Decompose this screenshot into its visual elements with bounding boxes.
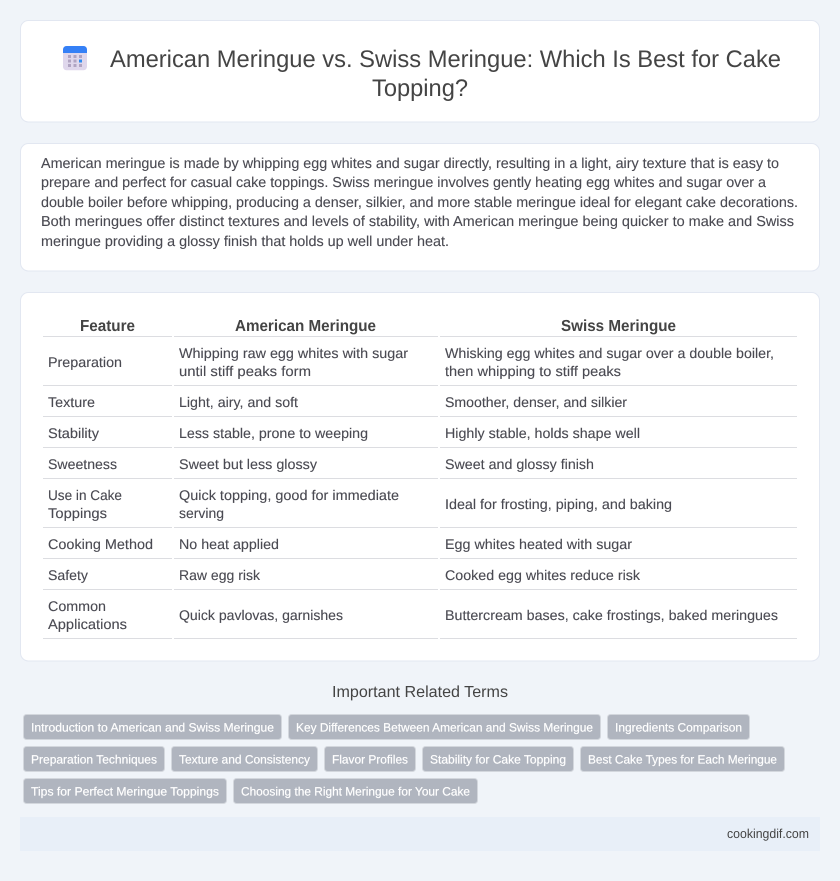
row: sweetness [48, 456, 594, 472]
tag: Tips for Perfect Meringue Toppings [31, 784, 219, 798]
icon: calendar [63, 46, 87, 70]
row: use in cake toppings: Quick topping, good for immediate [179, 487, 399, 503]
tag: Flavor Profiles [332, 752, 408, 766]
row: common applications: Applications [48, 616, 127, 632]
row: texture: Smoother, denser, and silkier [445, 394, 627, 410]
panel: comparison table [20, 292, 820, 661]
row: preparation: Preparation [48, 354, 122, 370]
intro paragraph: meringue providing a glossy finish that holds up well under heat. [41, 234, 449, 250]
tag: Choosing the Right Meringue for Your Cake [241, 784, 470, 798]
tag [324, 746, 416, 772]
table header row: American Meringue [235, 318, 376, 335]
tag [422, 746, 574, 772]
row: safety: Raw egg risk [179, 567, 261, 583]
footer bar: cookingdif.com [727, 826, 809, 841]
row: cooking method: Egg whites heated with sugar [445, 536, 632, 552]
row: common applications [48, 598, 778, 632]
title: American Meringue vs. Swiss Meringue: Which Is Best for Cake [110, 46, 781, 73]
footer bar [20, 817, 820, 851]
intro paragraph: Both meringues offer distinct textures and levels of stability, with American meringue being quicker to make and Swiss [41, 214, 794, 230]
tag: Introduction to American and Swiss Meringue [31, 720, 274, 734]
tag: Stability for Cake Topping [430, 752, 566, 766]
tag [608, 714, 750, 740]
tag [234, 778, 478, 804]
table header row: Feature [80, 318, 135, 335]
row: use in cake toppings [48, 487, 672, 521]
intro paragraph [41, 156, 798, 250]
row: use in cake toppings: Ideal for frosting, piping, and baking [445, 496, 672, 512]
row: texture: Texture [48, 394, 95, 410]
row: cooking method: Cooking Method [48, 536, 153, 552]
title [110, 46, 781, 102]
row: preparation: then whipping to stiff peaks [445, 363, 621, 379]
tag [288, 714, 600, 740]
intro paragraph: double boiler before whipping, producing a denser, silkier, and more stable meringue ideal for elegant cake decorations. [41, 195, 798, 211]
tag: Key Differences Between American and Swiss Meringue [296, 720, 593, 734]
panel: introduction [20, 144, 820, 271]
row: preparation: Whisking egg whites and sugar over a double boiler, [445, 345, 774, 361]
tag [24, 746, 164, 772]
row: texture [48, 394, 627, 410]
heading: important related terms: Important Related Terms [332, 684, 508, 701]
intro paragraph: prepare and perfect for casual cake toppings. Swiss meringue involves gently heating egg whites and sugar over a [41, 175, 766, 191]
row: use in cake toppings: serving [179, 505, 224, 521]
table header row [80, 318, 676, 335]
row: safety: Cooked egg whites reduce risk [445, 567, 641, 583]
row: preparation: Whipping raw egg whites with sugar [179, 345, 408, 361]
row: texture: Light, airy, and soft [179, 394, 298, 410]
row: safety [48, 567, 641, 583]
tag [172, 746, 318, 772]
row: stability: Highly stable, holds shape well [445, 425, 640, 441]
row: preparation [48, 345, 774, 379]
table header row: Swiss Meringue [561, 318, 676, 335]
row: use in cake toppings: Toppings [48, 505, 107, 521]
row: sweetness: Sweet but less glossy [179, 456, 317, 472]
title: Topping? [372, 75, 468, 102]
row: preparation: until stiff peaks form [179, 363, 311, 379]
related term tags [24, 714, 784, 804]
row: use in cake toppings: Use in Cake [48, 487, 122, 503]
row: cooking method: No heat applied [179, 536, 279, 552]
tag [24, 778, 226, 804]
row: stability [48, 425, 640, 441]
row: safety: Safety [48, 567, 88, 583]
tag [24, 714, 282, 740]
row: common applications: Buttercream bases, cake frostings, baked meringues [445, 607, 778, 623]
tag: Best Cake Types for Each Meringue [588, 752, 777, 766]
row: stability: Stability [48, 425, 99, 441]
row: sweetness: Sweetness [48, 456, 117, 472]
row: common applications: Common [48, 598, 106, 614]
intro paragraph: American meringue is made by whipping egg whites and sugar directly, resulting in a light, airy texture that is easy to [41, 156, 779, 172]
panel: header [20, 20, 820, 122]
row: sweetness: Sweet and glossy finish [445, 456, 594, 472]
tag: Ingredients Comparison [615, 720, 742, 734]
tag: Preparation Techniques [31, 752, 157, 766]
row: stability: Less stable, prone to weeping [179, 425, 368, 441]
row: common applications: Quick pavlovas, garnishes [179, 607, 343, 623]
row: cooking method [48, 536, 632, 552]
tag: Texture and Consistency [179, 752, 310, 766]
tag [580, 746, 784, 772]
